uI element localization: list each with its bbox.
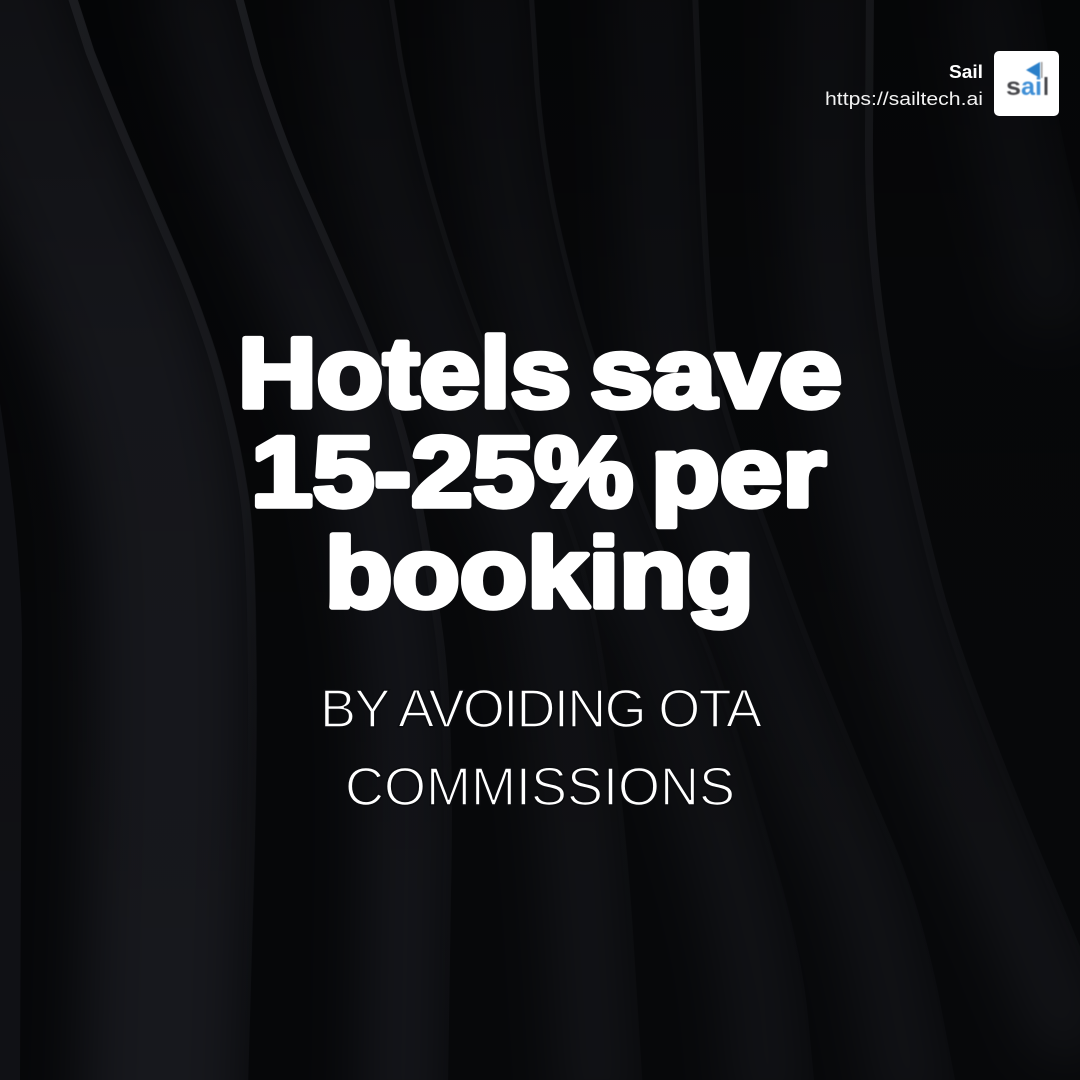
title: 15-25%	[251, 416, 633, 527]
title	[238, 317, 842, 628]
brand name: Sail	[949, 62, 983, 82]
brand name and url	[825, 62, 983, 109]
subtitle	[320, 679, 762, 817]
website url: https://sailtech.ai	[825, 89, 983, 109]
title: save	[590, 317, 842, 428]
logo mark: l	[1043, 73, 1049, 101]
subtitle: COMMISSIONS	[345, 757, 735, 817]
subtitle: BY AVOIDING OTA	[320, 679, 762, 739]
logo mark	[1006, 62, 1049, 101]
logo mark: s	[1006, 73, 1021, 101]
title: Hotels	[238, 317, 571, 428]
title: per	[651, 416, 826, 527]
logo tile	[994, 51, 1059, 116]
title: booking	[325, 517, 754, 628]
logo mark: ai	[1021, 73, 1042, 101]
logo	[994, 51, 1059, 116]
